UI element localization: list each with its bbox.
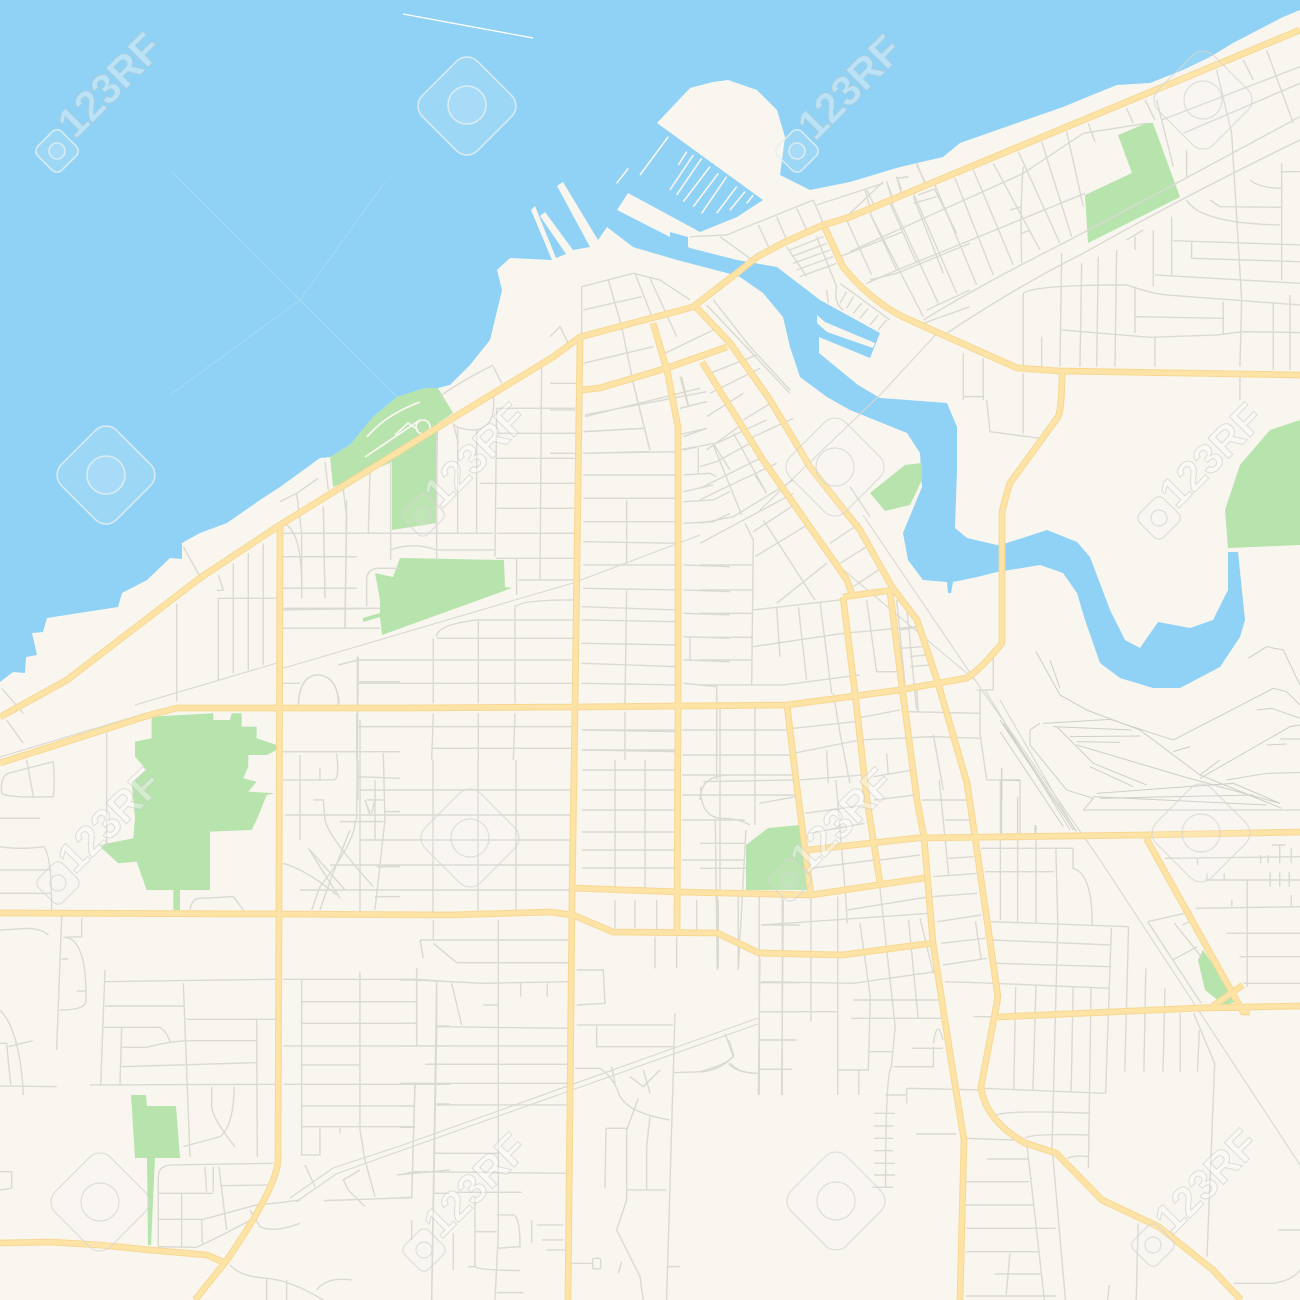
small marina basin [670, 232, 688, 247]
park: riverside [870, 463, 922, 511]
streets: west lake side [0, 500, 400, 920]
watermark row 3 [34, 759, 1256, 907]
park: northeast [1085, 123, 1180, 243]
watermark row 1: 123RF [48, 24, 171, 146]
streets: southwest [0, 917, 450, 1300]
park: south central [746, 825, 808, 890]
rail yard [1000, 647, 1300, 833]
streets: south east [700, 780, 1300, 1300]
watermark row 4: 123RF [414, 1124, 537, 1246]
watermark row 2: 123RF [414, 394, 537, 516]
rail lines [0, 330, 1300, 1202]
watermark row 2: 123RF [1150, 394, 1273, 516]
streets: north east [850, 50, 1300, 400]
streets: central west [280, 365, 730, 760]
lake lines [170, 14, 533, 400]
parks [98, 123, 1300, 1245]
park: lakeside [330, 388, 453, 530]
streets: south of main road, west and centre [285, 708, 795, 913]
park: central west field [363, 558, 512, 635]
watermark row 4: 123RF [1145, 1120, 1268, 1242]
lakeside park paths [365, 402, 430, 457]
watermark row 2 [51, 394, 1273, 542]
watermark row 3: 123RF [780, 759, 903, 881]
park: east [1225, 420, 1300, 548]
watermark row 1 [33, 24, 1258, 175]
streets: harbor and downtown north [550, 163, 970, 453]
lake and river water [0, 0, 1300, 688]
land strip in docks [817, 315, 875, 348]
watermark row 3: 123RF [48, 759, 171, 881]
park: southwest [131, 1095, 180, 1245]
park: southeast triangle [1198, 950, 1240, 1006]
park: large west park [98, 713, 277, 910]
watermark row 1: 123RF [788, 26, 911, 148]
watermark row 4 [45, 1120, 1268, 1274]
marina piers [617, 137, 753, 213]
streets: downtown [700, 400, 1040, 800]
streets: below second road [400, 900, 800, 1300]
